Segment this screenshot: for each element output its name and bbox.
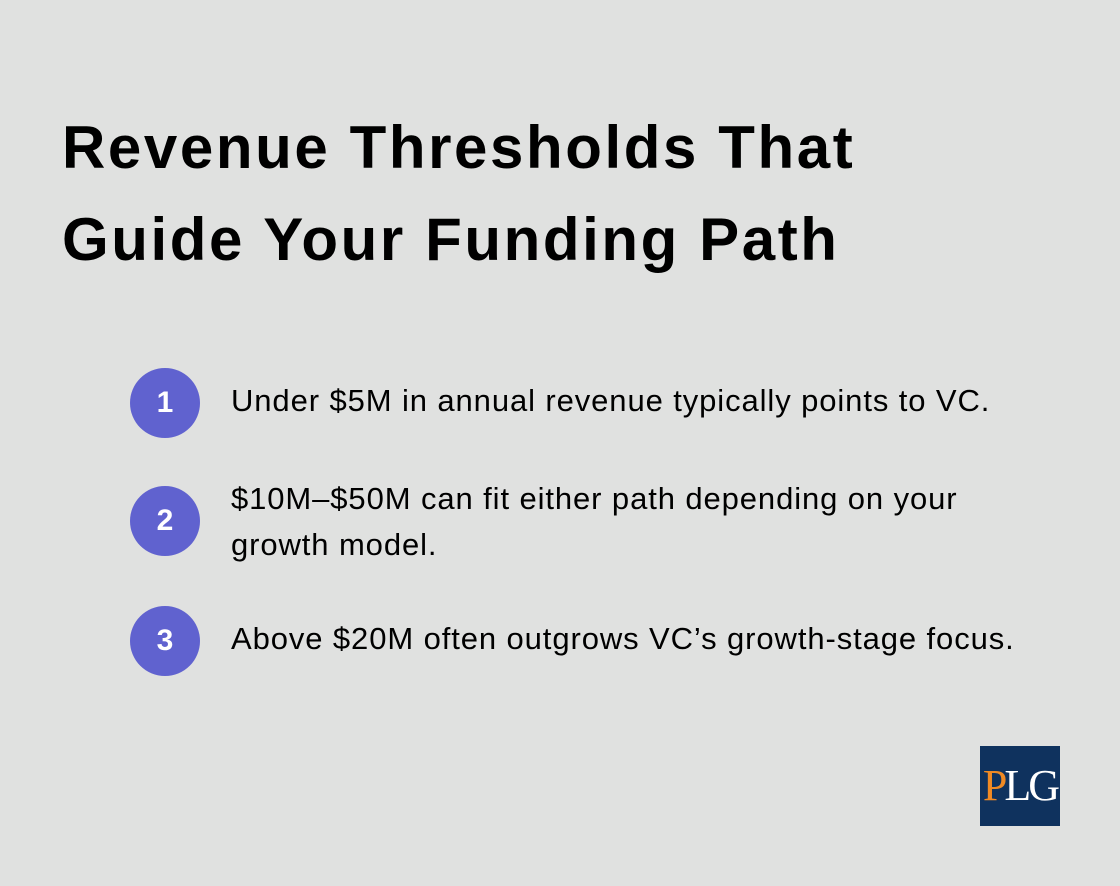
- text 3: Above $20M often outgrows VC’s growth-stage focus.: [231, 621, 1015, 656]
- title: Guide Your Funding Path: [62, 206, 840, 273]
- badge 3: [130, 606, 200, 676]
- item 1: [130, 368, 990, 438]
- title: [62, 114, 855, 273]
- text 1: Under $5M in annual revenue typically points to VC.: [231, 383, 990, 418]
- badge 2: 2: [157, 504, 173, 537]
- badge 1: [130, 368, 200, 438]
- item 2: [130, 481, 958, 562]
- item 3: [130, 606, 1015, 676]
- badge 3: 3: [157, 624, 173, 657]
- logo: PLG: [983, 761, 1057, 810]
- badge 2: [130, 486, 200, 556]
- title: Revenue Thresholds That: [62, 114, 855, 181]
- badge 1: 1: [157, 386, 173, 419]
- text 2: $10M–$50M can fit either path depending on your growth model.: [231, 481, 958, 562]
- logo: [980, 746, 1060, 826]
